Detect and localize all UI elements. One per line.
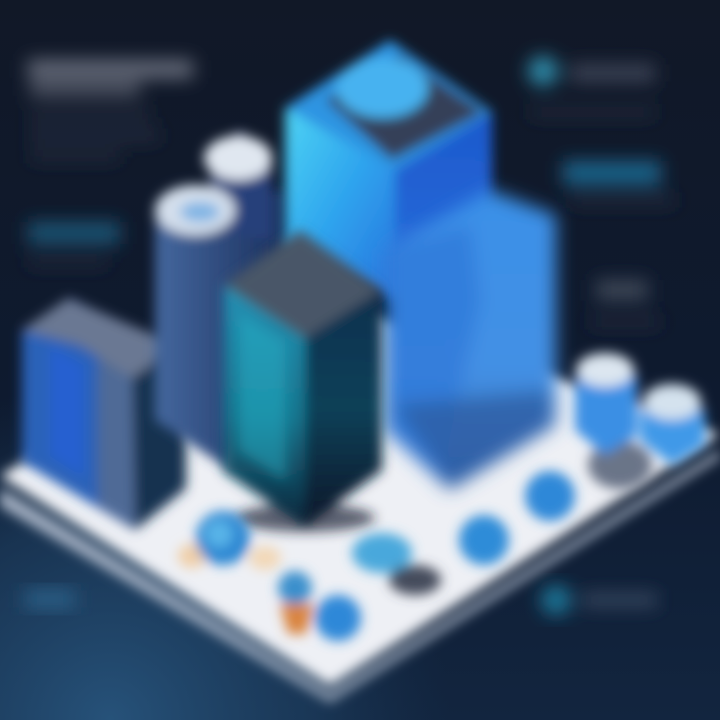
text block: bottom right [541, 585, 657, 615]
icon: platform node 5 [525, 471, 575, 521]
icon: platform node 4 [459, 515, 509, 565]
chart: large blue cube [285, 40, 492, 300]
text block: right heading [563, 161, 675, 204]
icon: right cylinder pair [575, 353, 705, 489]
platform [0, 290, 720, 702]
chart: dark teal server tower [224, 230, 382, 532]
text block: top right [528, 56, 655, 116]
icon: platform node 3 [352, 533, 441, 595]
chart: left building block [22, 298, 186, 530]
text block: right small [590, 280, 660, 326]
icon: platform node 1 [178, 511, 281, 570]
chart: tall tower with dome [155, 130, 285, 470]
chart: lower right blue box [385, 190, 556, 490]
icon: platform node 2 [278, 571, 361, 641]
text block: left heading [28, 222, 120, 265]
text block: bottom left [25, 590, 75, 608]
text block: title top left [28, 60, 193, 160]
background glow [0, 380, 450, 720]
